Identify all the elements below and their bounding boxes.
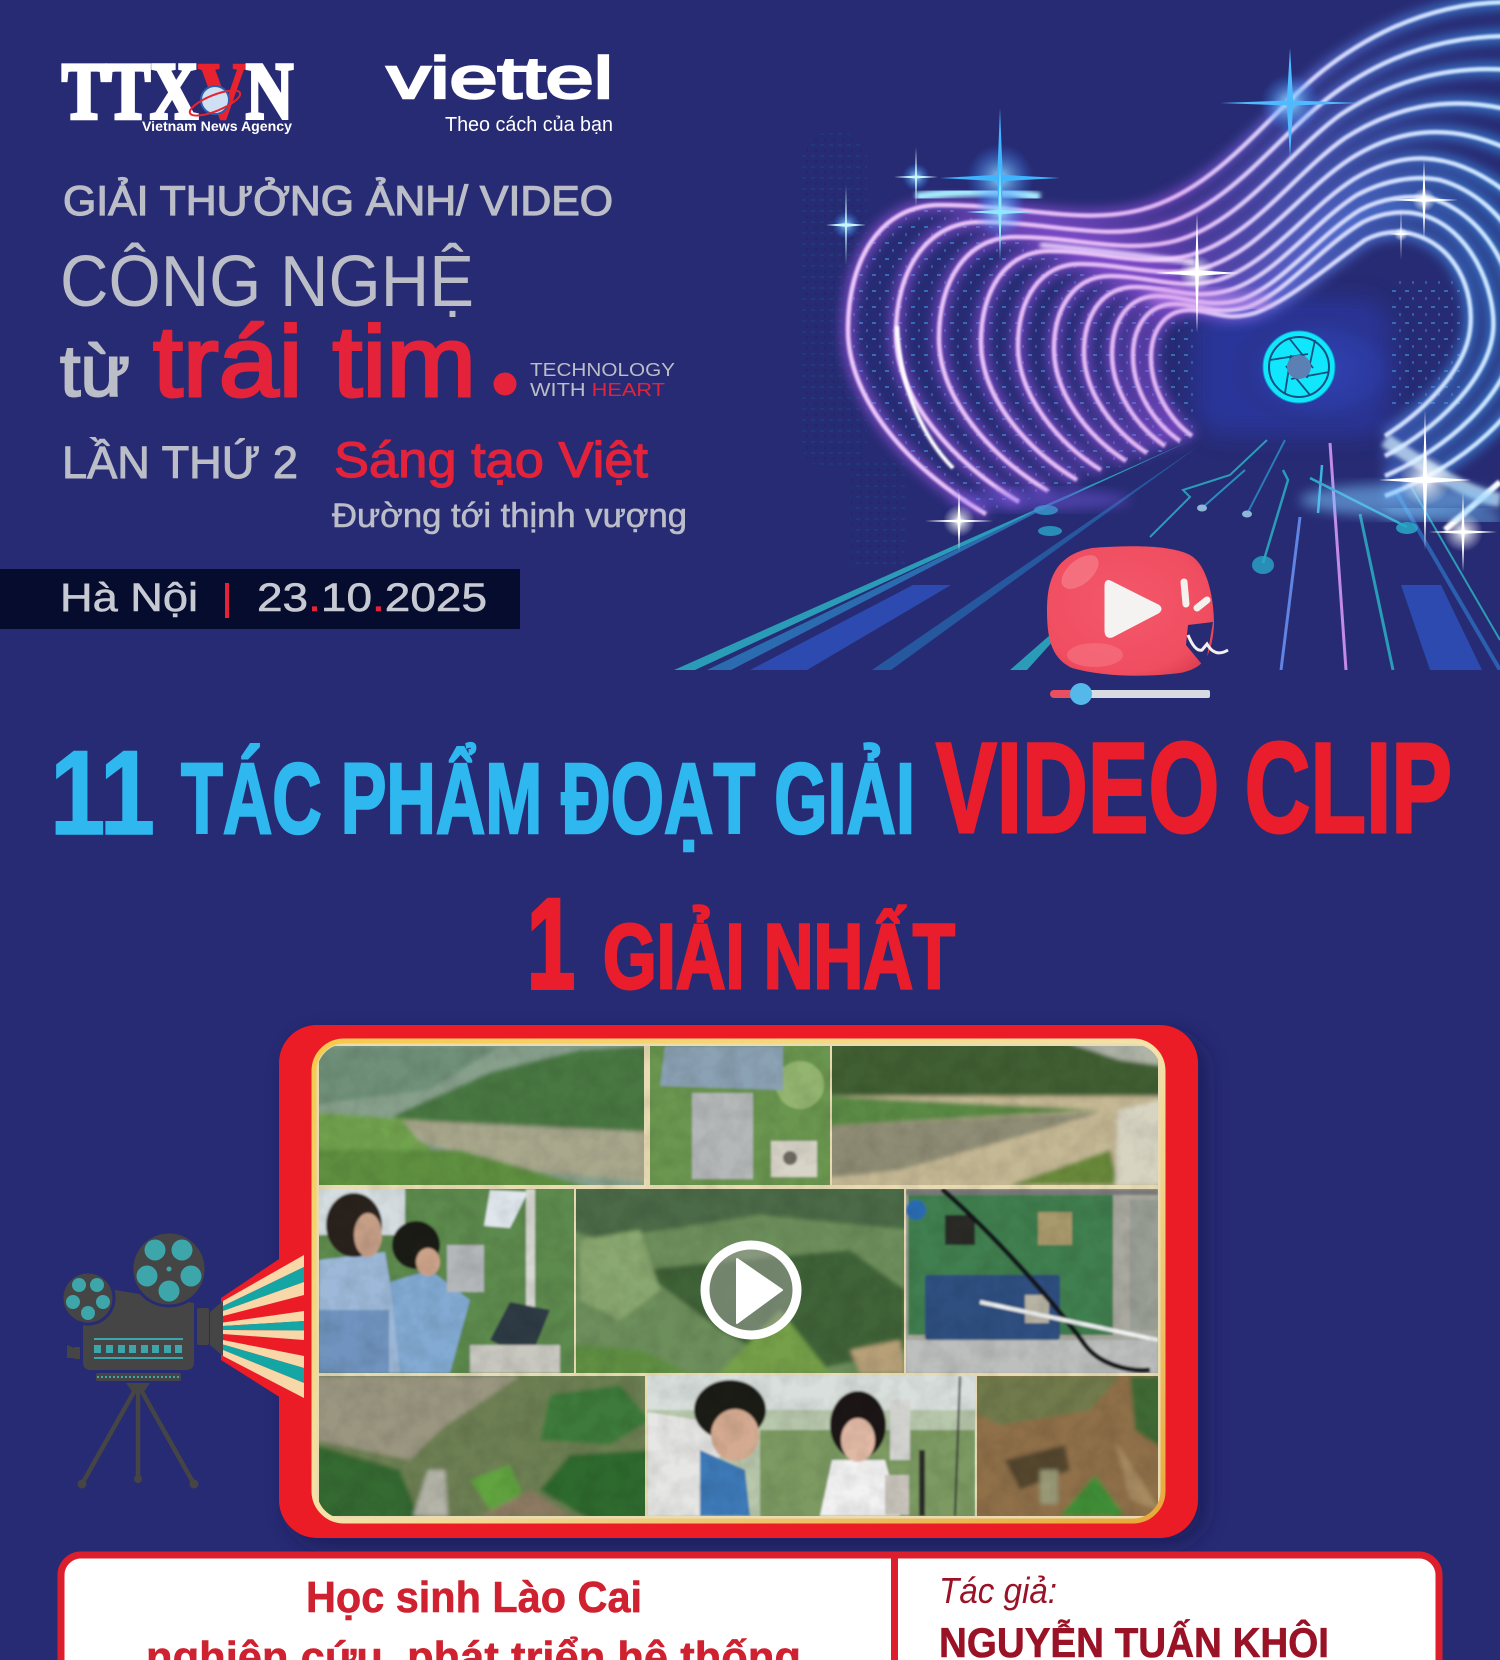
logo: TTXVN Vietnam News Agency: Vietnam News Agency [142,118,292,134]
photo collage [310,1040,1165,1520]
award title block: CÔNG NGHỆ [60,242,474,322]
photo: landslide aerial [315,1370,650,1520]
projector light beam [221,1245,306,1410]
photo: flooded valley [319,1046,644,1185]
main heading: 11 winning works [50,717,1452,860]
award title block [60,176,687,535]
award title block: Đường tới thịnh vượng [332,497,687,535]
photo: muddy river [832,1046,1158,1185]
sparkle stars [826,48,1497,572]
award title block: trái tim [153,306,476,418]
photo: sensor box with solar panel [650,1046,830,1185]
glowing centre of the tunnel [1195,300,1410,435]
logo: TTXVN Vietnam News Agency: TTX [62,48,198,136]
date and location bar [0,569,520,629]
city lights inside tunnel [848,205,1460,514]
date and location bar: 23.10.2025 [257,576,487,620]
award title block: LẦN THỨ 2 [62,437,298,488]
sub heading: first prize [527,873,955,1016]
neon wave strands glow [848,2,1500,514]
icon: red play button character [1047,546,1228,676]
road with circuit lines [674,440,1500,670]
photo: students with equipment outdoors [640,1370,980,1520]
icon: play button [705,1245,797,1335]
photo: eroded soil with machine [977,1376,1158,1516]
logo: viettel [387,46,613,136]
gold frame [314,1041,1163,1521]
logo: TTXVN Vietnam News Agency: V [198,48,248,136]
logo: viettel: Theo cách của bạn [445,114,613,136]
photo: circuit board [906,1189,1158,1373]
award title block: Sáng tạo Việt [334,432,648,488]
icon: movie camera on tripod [62,1232,223,1488]
photo: aerial view of hills [570,1185,910,1380]
road horizon glow [950,490,1130,510]
date and location bar: Hà Nội [60,576,198,620]
photo: two students with device [315,1185,580,1380]
photo texture overlay [319,1046,1158,1516]
faint city buildings [802,133,905,565]
award title block: GIẢI THƯỞNG ẢNH/ VIDEO [63,176,613,224]
work title [146,1573,801,1660]
logo: viettel: viettel [387,46,613,111]
bright highlights [897,192,1500,530]
award title block: từ [60,332,130,412]
icon: camera aperture [1263,331,1335,403]
header illustration: neon heart tunnel with camera aperture [674,2,1500,670]
neon wave strands [848,2,1500,514]
logo: TTXVN Vietnam News Agency: N [246,48,293,136]
work title: Học sinh Lào Cai [306,1573,642,1622]
video progress slider [1050,683,1210,705]
main heading: 11 winning works: 11 [50,726,155,860]
sub heading: first prize: GIẢI NHẤT [603,905,955,1008]
video frame panel [279,1025,1207,1546]
award title block: TECHNOLOGY [530,360,675,380]
author [939,1570,1329,1660]
info panel: work title and author [61,1555,1439,1660]
award title block: WITH HEART [530,380,665,400]
author: Tác giả: [939,1570,1057,1611]
main heading: 11 winning works: TÁC PHẨM ĐOẠT GIẢI [181,742,915,855]
sub heading: first prize: 1 [527,873,575,1016]
